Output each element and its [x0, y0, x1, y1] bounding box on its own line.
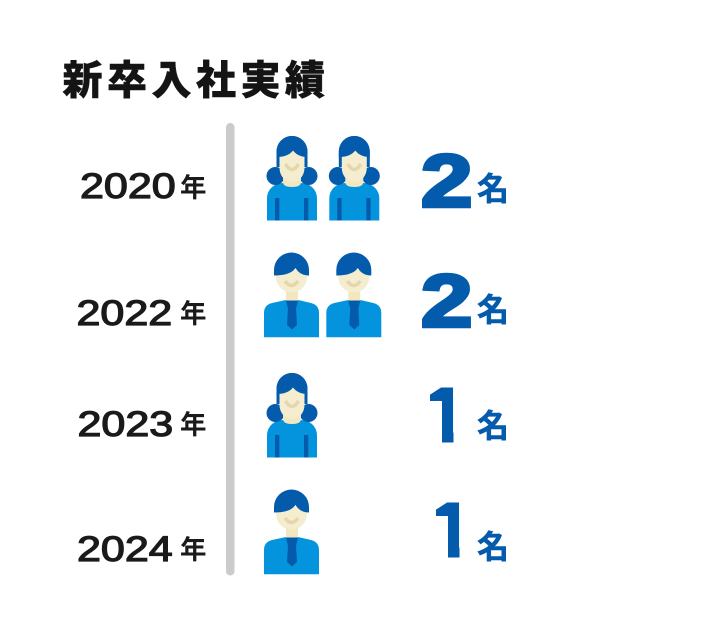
- year label: 2023: 2023: [78, 405, 173, 444]
- count: 1 person: 名: [477, 522, 509, 568]
- row: 2024: [77, 488, 509, 574]
- icon: one man: [264, 490, 319, 574]
- icon: one woman: [266, 373, 318, 458]
- count: 2 people: 2: [421, 259, 472, 342]
- year label: 2024: 年: [180, 528, 206, 567]
- row: 2020: [80, 136, 509, 222]
- count: 1 person: [430, 388, 506, 442]
- count: 2 people: 名: [477, 285, 509, 331]
- row: 2022: [76, 252, 509, 342]
- count: 2 people: 名: [477, 164, 509, 210]
- count: 1 person: 1: [429, 488, 472, 574]
- year label: 2023: 年: [180, 403, 206, 442]
- row: 2023: [78, 373, 509, 459]
- year label: 2022: 2022: [76, 294, 172, 333]
- count: 1 person: 1: [423, 373, 466, 459]
- count: 2 people: [421, 139, 509, 222]
- icons: two women: [266, 136, 380, 220]
- count: 1 person: 名: [477, 401, 509, 447]
- count: 2 people: [421, 259, 509, 342]
- count: 2 people: 2: [421, 139, 472, 222]
- title: 新卒入社実績: [62, 59, 330, 103]
- count: 1 person: [436, 502, 506, 562]
- year label: 2022: 年: [180, 292, 206, 331]
- year label: 2020: 2020: [80, 167, 176, 206]
- icons: two men: [264, 252, 381, 337]
- year label: 2020: 年: [180, 166, 206, 205]
- timeline vertical bar: [226, 123, 234, 576]
- year label: 2024: 2024: [77, 530, 173, 569]
